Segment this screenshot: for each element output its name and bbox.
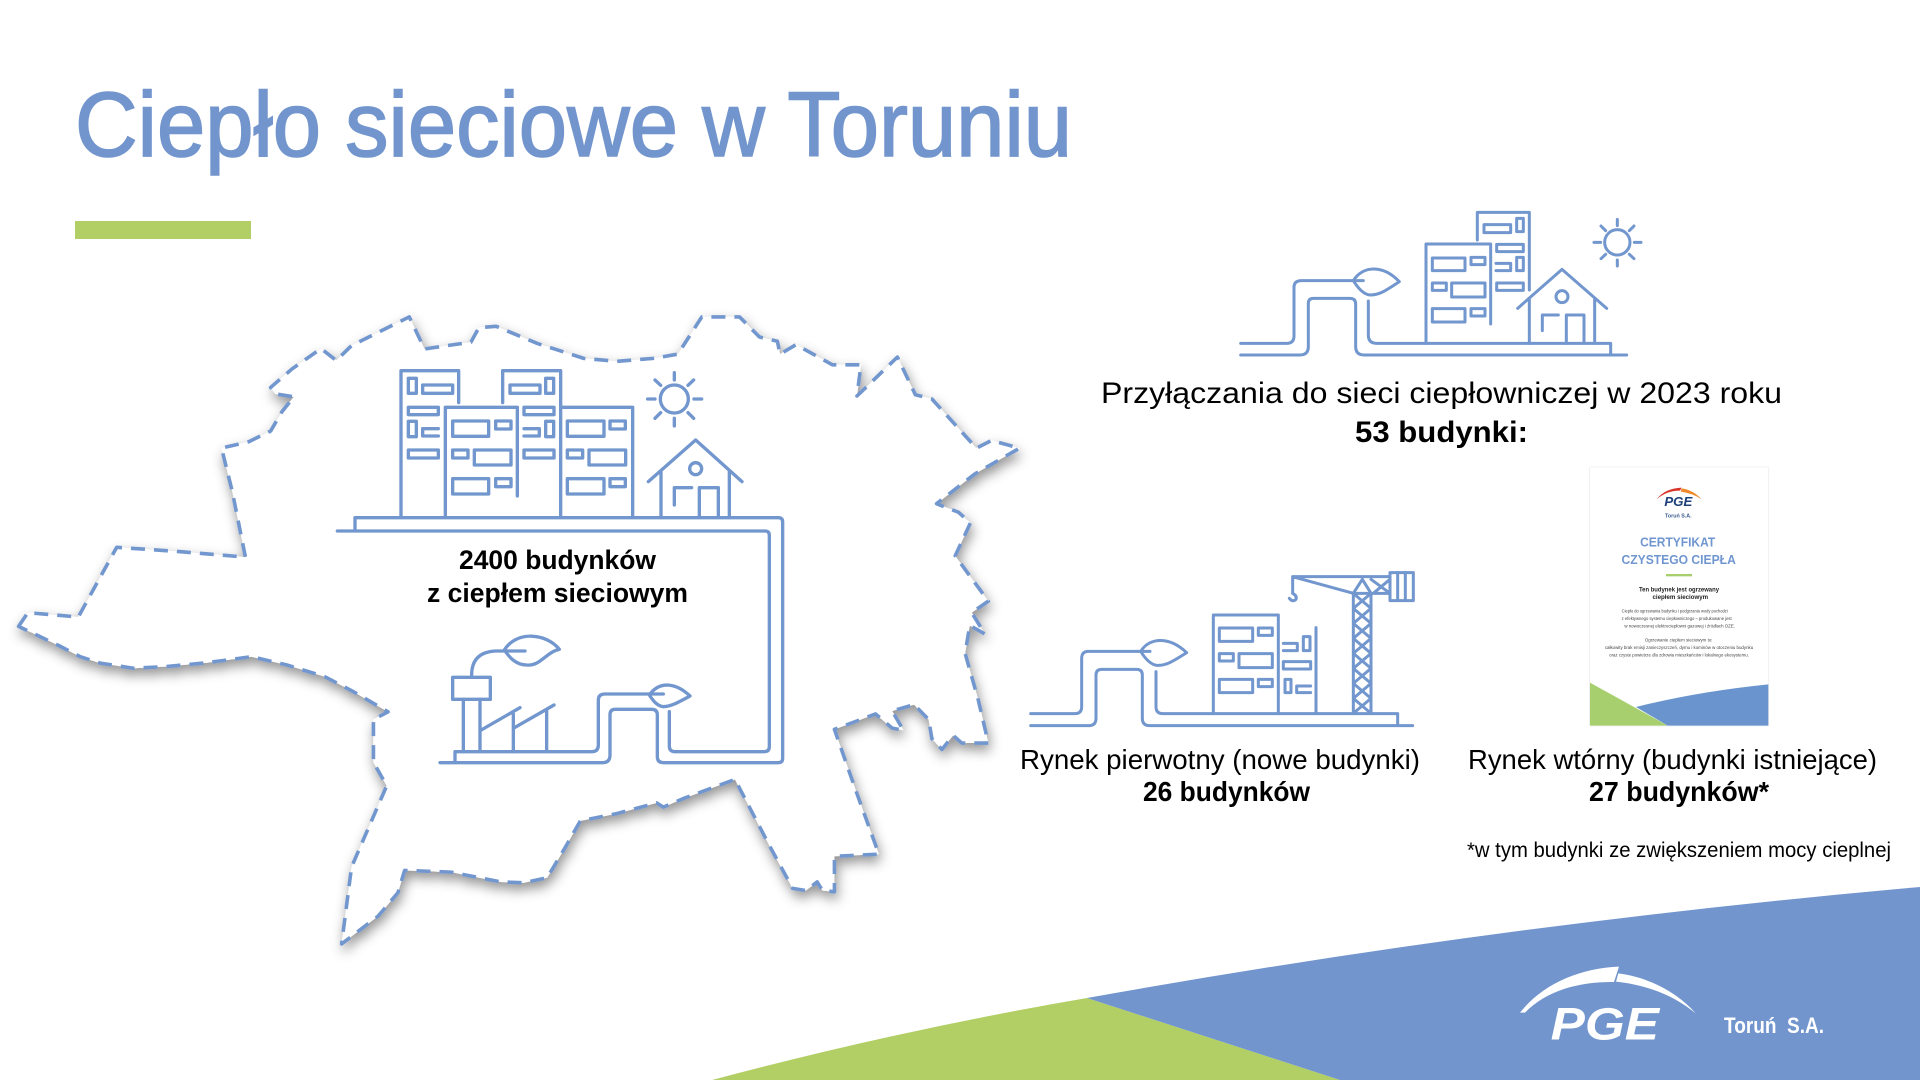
- bottom corner decoration: [712, 887, 1920, 1080]
- certificate: Ogrzewanie ciepłem sieciowym to:: [1645, 638, 1712, 643]
- PGE logo: PGE: [1551, 998, 1661, 1049]
- sun: [648, 373, 702, 426]
- certificate: CERTYFIKAT: [1640, 536, 1715, 550]
- apartment blocks: [401, 371, 633, 517]
- primary market text: 26 budynków: [1143, 776, 1310, 807]
- title: Ciepło sieciowe w Toruniu: [75, 74, 1072, 176]
- certificate: CZYSTEGO CIEPŁA: [1621, 553, 1736, 567]
- primary market text: Rynek pierwotny (nowe budynki): [1020, 744, 1420, 775]
- map of Toruń: [19, 317, 1019, 944]
- map caption: 2400 budynków: [459, 545, 657, 575]
- icon: new building and crane: [1031, 573, 1413, 726]
- heading: connections in 2023: Przyłączania do sieci ciepłowniczej w 2023 roku: [1101, 377, 1782, 410]
- certificate: z efektywnego systemu ciepłowniczego – produkowane jest: [1622, 616, 1732, 621]
- certificate: Ten budynek jest ogrzewany: [1639, 588, 1720, 594]
- heading: connections in 2023: [1101, 377, 1782, 449]
- heat plant: [453, 636, 690, 752]
- secondary market text: [1468, 744, 1877, 807]
- PGE logo: [1520, 967, 1696, 1049]
- certificate: całkowity brak emisji zanieczyszczeń, dymu i kominów w otoczeniu budynku: [1605, 645, 1754, 650]
- certificate logo: [1657, 488, 1702, 520]
- secondary market text: 27 budynków*: [1589, 776, 1769, 807]
- title accent bar: [75, 221, 251, 239]
- icon: city connected to heat plant: [337, 371, 783, 763]
- certificate corner shapes: [1590, 683, 1768, 726]
- certificate: [1590, 467, 1768, 726]
- primary market text: [1020, 744, 1420, 807]
- certificate: Ciepło do ogrzewania budynku i podgrzania wody pochodzi: [1622, 609, 1728, 614]
- heading: connections in 2023: 53 budynki:: [1355, 416, 1528, 449]
- house: [648, 440, 742, 517]
- certificate logo: PGE: [1664, 495, 1693, 509]
- certificate logo: Toruń S.A.: [1665, 514, 1692, 520]
- pipes and ground: [337, 518, 783, 763]
- footnote: *w tym budynki ze zwiększeniem mocy cieplnej: [1467, 839, 1891, 862]
- secondary market text: Rynek wtórny (budynki istniejące): [1468, 744, 1877, 775]
- certificate: oraz czyste powietrze dla zdrowia mieszkańców i lokalnego ekosystemu.: [1609, 653, 1749, 658]
- map caption: z ciepłem sieciowym: [427, 578, 688, 608]
- certificate: w nowoczesnej elektrociepłowni gazowej i źródłach OZE.: [1624, 624, 1735, 629]
- certificate: ciepłem sieciowym: [1652, 595, 1708, 601]
- company name: Toruń S.A.: [1724, 1013, 1824, 1038]
- icon: new connections: [1241, 212, 1641, 355]
- map caption: [427, 545, 688, 608]
